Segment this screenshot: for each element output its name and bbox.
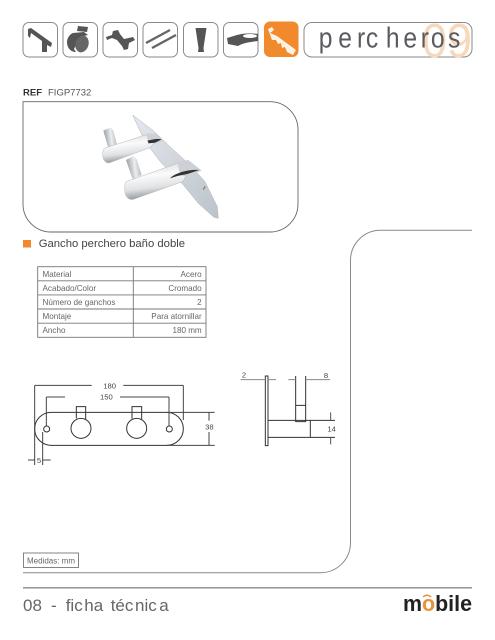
footer: page number and section title: téc — [111, 596, 134, 615]
footer rule — [23, 587, 472, 589]
technical drawing: front view: 38 — [205, 422, 214, 431]
footer: page number and section title: ha — [84, 596, 104, 615]
bullet: orange square — [23, 240, 31, 248]
units note — [24, 553, 78, 568]
icon: furniture leg — [184, 22, 218, 57]
table: specifications: Para atornillar — [151, 312, 202, 321]
product title — [23, 238, 185, 250]
icon: coat hooks (active, orange) — [264, 22, 298, 57]
icon: bar handle — [23, 22, 58, 57]
footer: page number and section title: - — [51, 596, 57, 615]
footer: page number and section title: fic — [66, 596, 83, 615]
logo: mobile: mobile — [403, 591, 472, 616]
panel: notes area outline — [23, 230, 472, 573]
footer: page number and section title: a — [159, 596, 169, 615]
technical drawing: side view — [241, 371, 337, 446]
table: specifications — [38, 267, 206, 337]
icon: hinge bracket — [103, 22, 138, 57]
table: specifications: Ancho — [42, 326, 66, 335]
table: specifications: Acabado/Color — [42, 284, 96, 293]
reference code: REF — [23, 88, 42, 98]
technical drawing: side view: 2 — [242, 371, 246, 380]
technical drawing: front view: 150 — [100, 392, 113, 401]
units note: Medidas: mm — [27, 556, 75, 566]
heading: percheros category label — [304, 15, 472, 68]
table: specifications: Montaje — [42, 312, 72, 321]
technical drawing: front view — [28, 382, 215, 465]
table: specifications: 2 — [197, 298, 202, 307]
table: specifications: Número de ganchos — [42, 298, 115, 307]
reference code: FIGP7732 — [48, 88, 91, 98]
product photo: double hook — [103, 115, 218, 218]
technical drawing: front view: 180 — [103, 382, 116, 391]
table: specifications: Cromado — [168, 284, 202, 293]
icon: tray — [224, 22, 258, 57]
technical drawing: front view: 5 — [37, 456, 41, 465]
technical drawing: side view: 8 — [324, 371, 328, 380]
heading: percheros category label: percheros — [319, 22, 460, 54]
footer: page number and section title: 08 — [23, 596, 42, 615]
technical drawing: side view: 14 — [327, 425, 337, 434]
table: specifications: Acero — [181, 270, 202, 279]
icon: caster wheel — [63, 22, 98, 57]
panel: product photo — [23, 102, 298, 232]
table: specifications: Material — [42, 270, 71, 279]
icon: rails — [143, 22, 178, 57]
heading: percheros category label: 09 — [422, 15, 472, 68]
footer: page number and section title: nic — [135, 596, 157, 615]
product name: Gancho perchero baño doble — [39, 238, 185, 250]
table: specifications: 180 mm — [172, 326, 202, 335]
